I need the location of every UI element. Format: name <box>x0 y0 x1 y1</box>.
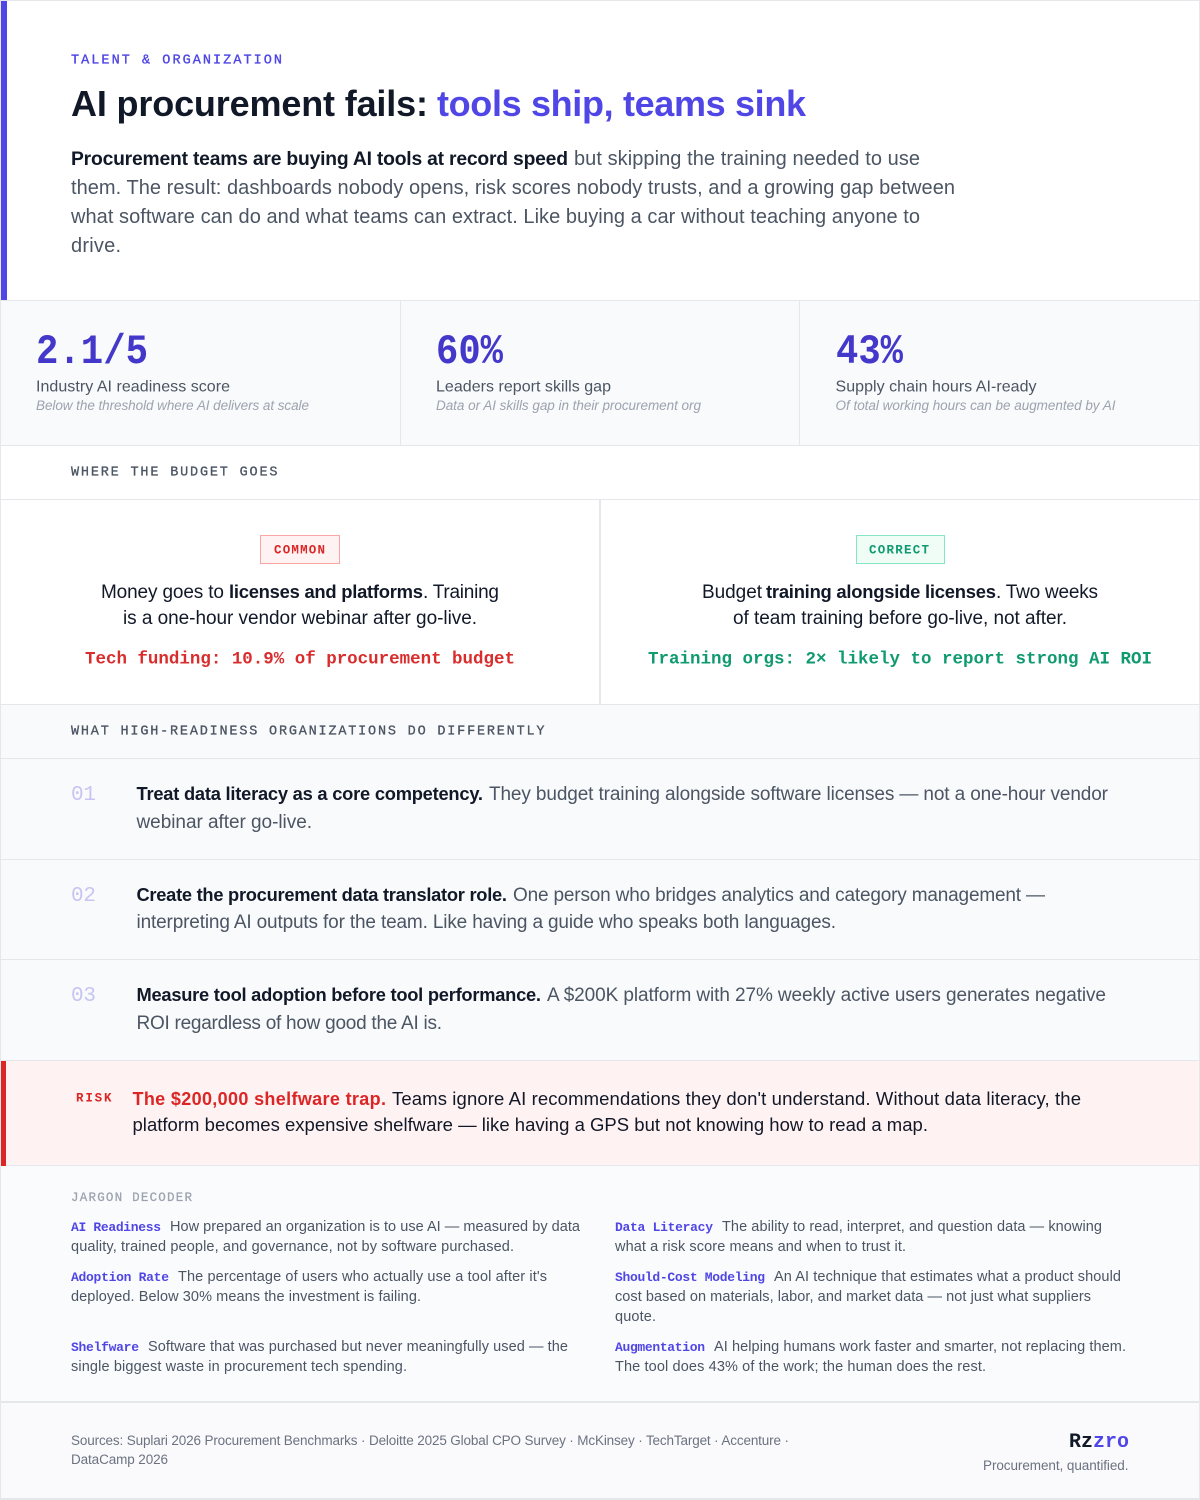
stat: readiness score: Below the threshold where AI delivers at scale <box>36 398 309 413</box>
panel: footer <box>0 1401 1200 1500</box>
section heading: what high-readiness organizations do differently <box>0 704 1200 759</box>
common description <box>101 581 499 629</box>
badge: common: COMMON <box>274 544 325 558</box>
correct statistic: Training orgs: 2× likely to report strong AI ROI <box>648 650 1152 670</box>
list item 01: webinar after go-live. <box>136 812 312 833</box>
term: Augmentation: AI helping humans work faster and smarter, not replacing them. <box>714 1339 1126 1355</box>
correct description: training alongside licenses <box>766 581 996 602</box>
term: Shelfware <box>71 1339 568 1375</box>
panel: common approach <box>0 500 600 704</box>
term: Adoption Rate <box>71 1269 547 1305</box>
list item 03: ROI regardless of how good the AI is. <box>136 1013 442 1034</box>
badge: correct <box>856 536 944 564</box>
sources <box>71 1433 789 1467</box>
stat: skills gap: 60% <box>436 328 504 376</box>
term: Adoption Rate: The percentage of users who actually use a tool after it's <box>178 1269 547 1285</box>
risk text: Teams ignore AI recommendations they don't understand. Without data literacy, the <box>392 1088 1081 1109</box>
correct description: . Two weeks <box>996 582 1098 603</box>
list item 01: Treat data literacy as a core competency. <box>136 783 483 804</box>
term: Adoption Rate: Adoption Rate <box>71 1270 169 1285</box>
list item 01: 01 <box>71 784 96 807</box>
list item 01: They budget training alongside software licenses — not a one-hour vendor <box>489 784 1109 805</box>
term: Should-Cost Modeling: quote. <box>615 1309 656 1325</box>
title: AI procurement fails: <box>71 83 428 124</box>
stat: AI-ready hours: 43% <box>836 328 904 376</box>
list item 03: A $200K platform with 27% weekly active users generates negative <box>547 985 1106 1006</box>
intro paragraph <box>70 148 955 257</box>
correct description: of team training before go-live, not after. <box>733 608 1067 629</box>
section heading: where the budget goes: WHERE THE BUDGET GOES <box>71 466 278 480</box>
term: Should-Cost Modeling <box>615 1269 1121 1325</box>
term: Shelfware: Software that was purchased but never meaningfully used — the <box>148 1339 568 1355</box>
term: Data Literacy: Data Literacy <box>615 1220 713 1235</box>
correct description <box>702 581 1098 629</box>
term: Data Literacy: The ability to read, interpret, and question data — knowing <box>722 1219 1102 1235</box>
panel: header <box>0 0 1200 301</box>
intro paragraph: what software can do and what teams can extract. Like buying a car without teaching anyone to <box>70 206 920 228</box>
intro paragraph: them. The result: dashboards nobody opens, risk scores nobody trusts, and a growing gap between <box>71 177 955 199</box>
list item 02: interpreting AI outputs for the team. Like having a guide who speaks both languages. <box>136 912 836 933</box>
risk text: The $200,000 shelfware trap. <box>132 1089 386 1109</box>
term: AI Readiness: quality, trained people, and governance, not by software purchased. <box>71 1239 514 1255</box>
intro paragraph: Procurement teams are buying AI tools at record speed <box>71 149 568 170</box>
common description: . Training <box>423 582 499 603</box>
stat: AI-ready hours: Supply chain hours AI-ready <box>836 378 1036 396</box>
stat: readiness score: Industry AI readiness score <box>36 378 230 396</box>
stat: readiness score: 2.1/5 <box>36 328 148 376</box>
common description: licenses and platforms <box>229 581 423 602</box>
term: Shelfware: Shelfware <box>71 1340 139 1355</box>
term: Augmentation <box>615 1339 1126 1375</box>
sources: Sources: Suplari 2026 Procurement Benchmarks · Deloitte 2025 Global CPO Survey · McKinsey · TechTarget · Accenture · <box>71 1433 789 1448</box>
stat: readiness score <box>36 328 309 413</box>
common description: is a one-hour vendor webinar after go-live. <box>123 608 477 629</box>
intro paragraph: but skipping the training needed to use <box>574 148 920 170</box>
risk text <box>132 1088 1081 1135</box>
stat: skills gap: Leaders report skills gap <box>436 378 611 396</box>
term: Data Literacy: what a risk score means and when to trust it. <box>614 1239 906 1255</box>
title: tools ship, teams sink <box>437 83 807 124</box>
brand wordmark: zro <box>1093 1431 1129 1454</box>
panel: correct approach <box>601 500 1200 704</box>
risk label: RISK <box>76 1092 112 1106</box>
panel: jargon decoder <box>0 1166 1200 1402</box>
list item 02: Create the procurement data translator role. <box>136 884 507 905</box>
eyebrow label: TALENT & ORGANIZATION <box>71 54 282 68</box>
term: Shelfware: single biggest waste in procurement tech spending. <box>71 1359 407 1375</box>
list item 02 <box>0 860 1200 960</box>
list item 01 <box>0 759 1200 860</box>
sources: DataCamp 2026 <box>71 1452 168 1467</box>
correct description: Budget <box>702 582 763 603</box>
list item 03: 03 <box>71 985 96 1008</box>
list item 02: One person who bridges analytics and category management — <box>513 885 1045 906</box>
term: Should-Cost Modeling: An AI technique that estimates what a product should <box>774 1269 1121 1285</box>
common statistic: Tech funding: 10.9% of procurement budget <box>85 650 515 670</box>
title <box>71 83 807 124</box>
stat: AI-ready hours: Of total working hours can be augmented by AI <box>836 398 1116 413</box>
term: AI Readiness <box>71 1219 581 1255</box>
term: Data Literacy <box>614 1219 1102 1255</box>
term: AI Readiness: How prepared an organization is to use AI — measured by data <box>170 1219 581 1235</box>
term: Augmentation: Augmentation <box>615 1340 705 1355</box>
section heading: what high-readiness organizations do differently: WHAT HIGH-READINESS ORGANIZATIONS DO DIFFERENTLY <box>71 724 544 740</box>
jargon heading: JARGON DECODER <box>71 1191 192 1205</box>
term: AI Readiness: AI Readiness <box>71 1220 161 1235</box>
brand wordmark: Rz <box>1069 1431 1093 1454</box>
list item 03: Measure tool adoption before tool performance. <box>136 984 541 1005</box>
section heading: where the budget goes <box>0 446 1200 500</box>
stat: skills gap <box>436 328 701 413</box>
list item 02: 02 <box>71 885 96 908</box>
panel: key statistics <box>0 300 1200 446</box>
term: Should-Cost Modeling: cost based on materials, labor, and market data — not just what suppliers <box>615 1289 1091 1305</box>
common description: Money goes to <box>101 582 224 603</box>
stat: AI-ready hours <box>836 328 1116 413</box>
term: Adoption Rate: deployed. Below 30% means the investment is failing. <box>71 1289 421 1305</box>
brand wordmark <box>1069 1431 1129 1454</box>
badge: common <box>260 536 340 564</box>
panel: risk callout <box>0 1061 1200 1166</box>
list item 03 <box>0 960 1200 1061</box>
term: Should-Cost Modeling: Should-Cost Modeling <box>615 1270 765 1285</box>
risk text: platform becomes expensive shelfware — like having a GPS but not knowing how to read a map. <box>132 1114 928 1135</box>
intro paragraph: drive. <box>71 235 121 257</box>
tagline: Procurement, quantified. <box>983 1458 1128 1473</box>
stat: skills gap: Data or AI skills gap in their procurement org <box>436 398 701 413</box>
term: Augmentation: The tool does 43% of the work; the human does the rest. <box>615 1359 986 1375</box>
badge: correct: CORRECT <box>869 544 929 558</box>
